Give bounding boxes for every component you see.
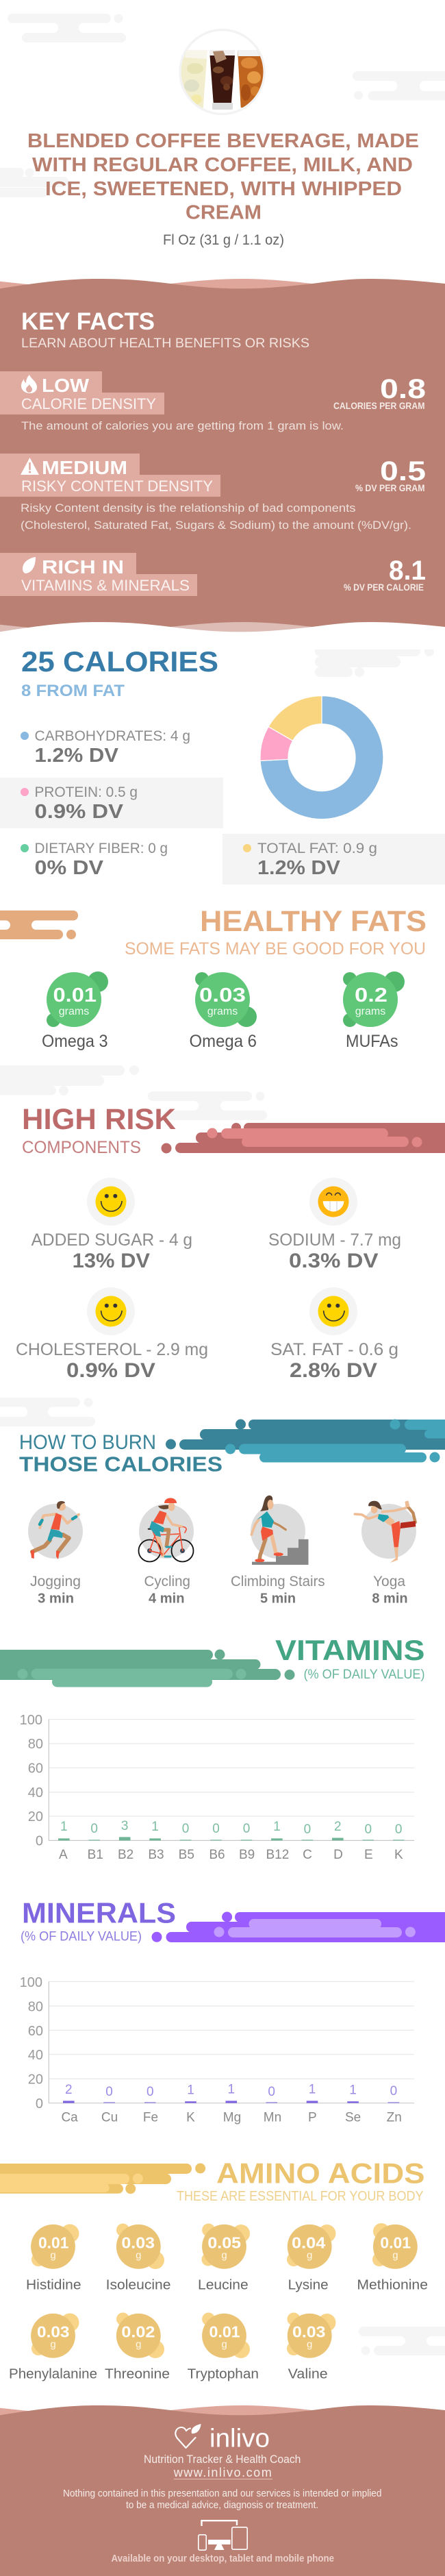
risk item: cholesterol: CHOLESTEROL - 2.9 mg	[16, 1340, 208, 1359]
bar chart: vitamins: 0	[212, 1822, 220, 1836]
bar chart: vitamins: 60	[28, 1761, 43, 1776]
stat: MUFAs: grams	[355, 1006, 385, 1017]
bar chart: minerals: 40	[28, 2048, 43, 2063]
icon: leaf	[23, 557, 36, 573]
photo: three iced drinks in glasses	[179, 30, 265, 114]
legend: total fat: TOTAL FAT: 0.9 g	[257, 841, 377, 856]
heading: vitamins: VITAMINS	[275, 1634, 424, 1666]
fact: rich in vitamins and minerals: RICH IN	[42, 556, 124, 578]
stat: MUFAs: MUFAs	[346, 1032, 398, 1051]
bar chart: vitamins: 0	[304, 1822, 311, 1837]
exercise: yoga	[355, 1501, 416, 1606]
heading: high risk: HIGH RISK	[22, 1103, 176, 1136]
stat: omega 6: 0.03	[199, 984, 246, 1006]
donut chart	[260, 696, 383, 819]
title: ICE, SWEETENED, WITH WHIPPED	[45, 178, 402, 200]
bar chart: minerals: 0	[390, 2084, 397, 2098]
serving size subtitle: Fl Oz (31 g / 1.1 oz)	[163, 232, 284, 248]
fact: medium risky content density: 0.5	[380, 456, 426, 486]
heading: healthy fats: HEALTHY FATS	[200, 905, 427, 938]
amino: methionine	[357, 2223, 428, 2293]
icon: smiley	[96, 1187, 126, 1217]
heading: how to burn those calories: THOSE CALORIES	[19, 1452, 222, 1476]
bar chart: minerals: P	[308, 2111, 317, 2125]
decoration: minerals bars	[152, 1911, 445, 1942]
heading: how to burn those calories	[19, 1431, 222, 1476]
amino: phenylalanine: Phenylalanine	[9, 2366, 97, 2382]
amino: leucine	[198, 2224, 250, 2293]
bar chart: vitamins: B12	[266, 1848, 289, 1862]
website link: www.inlivo.com	[173, 2466, 272, 2479]
fact: low calorie density: CALORIES PER GRAM	[333, 400, 424, 411]
amino: lysine: 0.04	[292, 2234, 326, 2252]
bar chart: minerals: 80	[28, 1999, 43, 2014]
stat: omega 6	[189, 972, 257, 1051]
panel: footer: Available on your desktop, tablet and mobile phone	[111, 2553, 334, 2564]
icon: stair climber	[251, 1496, 308, 1565]
legend: dietary fiber: DIETARY FIBER: 0 g	[34, 841, 168, 856]
amino: threonine: Threonine	[105, 2366, 170, 2382]
exercise: yoga: Yoga	[373, 1574, 405, 1589]
fact: low calorie density: 0.8	[380, 374, 426, 404]
bar chart: vitamins: A	[59, 1848, 68, 1862]
amino: histidine: 0.01	[38, 2234, 69, 2252]
heading: minerals: (% OF DAILY VALUE)	[21, 1930, 142, 1944]
heading: amino acids: AMINO ACIDS	[216, 2157, 424, 2190]
exercise: climbing stairs: 5 min	[260, 1591, 296, 1606]
amino: phenylalanine: 0.03	[37, 2323, 70, 2341]
fact: low calorie density: LOW	[42, 375, 90, 396]
legend: total fat: 1.2% DV	[257, 857, 341, 879]
risk item: saturated fat	[270, 1287, 398, 1382]
heading: 25 calories: 25 CALORIES	[21, 645, 218, 678]
bar chart: minerals: Fe	[143, 2111, 158, 2125]
icon: yoga pose	[355, 1501, 416, 1563]
panel: footer	[0, 2405, 445, 2576]
bar chart: vitamins: 0	[36, 1833, 43, 1848]
stat: omega 3: grams	[59, 1006, 89, 1017]
exercise: cycling	[138, 1498, 194, 1606]
amino: methionine: 0.01	[380, 2234, 411, 2252]
stat: omega 3	[42, 971, 108, 1051]
icon: warning triangle	[21, 458, 39, 475]
amino: isoleucine: 0.03	[121, 2234, 155, 2252]
bar chart: vitamins: 20	[28, 1809, 43, 1824]
bar chart: minerals: K	[186, 2111, 195, 2125]
exercise: jogging	[28, 1501, 83, 1606]
disclaimer: to be a medical advice, diagnosis or treatment.	[126, 2500, 318, 2511]
legend: protein: PROTEIN: 0.5 g	[34, 784, 138, 800]
panel: key facts background	[0, 279, 445, 649]
amino: valine: g	[307, 2339, 312, 2351]
bar chart: vitamins: E	[364, 1848, 373, 1862]
fact: medium risky content density	[0, 454, 426, 532]
legend: carbohydrates	[21, 728, 190, 767]
bar chart: minerals: 1	[187, 2083, 194, 2098]
risk item: saturated fat: 2.8% DV	[290, 1359, 377, 1382]
fact: rich in vitamins and minerals: VITAMINS & MINERALS	[21, 577, 190, 594]
title: BLENDED COFFEE BEVERAGE, MADE	[27, 130, 419, 152]
bar chart: minerals: 1	[349, 2083, 357, 2098]
amino: tryptophan: Tryptophan	[188, 2366, 259, 2382]
heading: healthy fats: SOME FATS MAY BE GOOD FOR YOU	[125, 939, 426, 958]
risk item: cholesterol	[16, 1287, 208, 1382]
heading: amino acids: THESE ARE ESSENTIAL FOR YOUR BODY	[177, 2189, 423, 2204]
fact: rich in vitamins and minerals: % DV PER CALORIE	[344, 582, 424, 593]
fact: rich in vitamins and minerals: 8.1	[389, 556, 426, 586]
bar chart: minerals: Ca	[61, 2111, 78, 2125]
bar chart: vitamins: 0	[182, 1822, 189, 1836]
stat: omega 6: Omega 6	[189, 1032, 257, 1051]
icon: grinning face	[318, 1187, 349, 1217]
amino: histidine: g	[50, 2250, 56, 2262]
bar chart: minerals: Zn	[387, 2111, 402, 2125]
bar chart: minerals: 100	[20, 1975, 42, 1990]
amino: isoleucine	[106, 2224, 171, 2293]
icon: devices	[199, 2521, 247, 2550]
amino: threonine	[105, 2313, 170, 2382]
bar chart: vitamins: B1	[88, 1848, 103, 1862]
bar chart: minerals: 0	[147, 2085, 154, 2099]
legend: dietary fiber	[21, 841, 168, 879]
bar chart: vitamins: 0	[395, 1822, 402, 1837]
legend: protein: 0.9% DV	[34, 801, 124, 823]
bar chart: vitamins: B3	[148, 1848, 164, 1862]
icon: smiley	[318, 1296, 349, 1326]
heading: vitamins	[275, 1634, 424, 1682]
exercise: cycling: 4 min	[149, 1591, 185, 1606]
fact: low calorie density: CALORIE DENSITY	[21, 395, 156, 412]
amino: methionine: g	[392, 2250, 398, 2262]
amino: leucine: 0.05	[207, 2234, 241, 2252]
bar chart: vitamins: 1	[60, 1820, 68, 1834]
bar chart: minerals: 20	[28, 2072, 43, 2087]
amino: valine	[287, 2313, 335, 2382]
heading: key facts: LEARN ABOUT HEALTH BENEFITS OR RISKS	[21, 336, 309, 351]
bar chart: vitamins: 0	[243, 1822, 250, 1836]
fact: medium risky content density: Risky Content density is the relationship of bad components	[21, 501, 356, 515]
heading: 25 calories: 8 FROM FAT	[21, 682, 125, 700]
fact: medium risky content density: RISKY CONTENT DENSITY	[21, 478, 213, 495]
fact: rich in vitamins and minerals	[0, 553, 426, 596]
bar chart: minerals: 0	[268, 2085, 275, 2099]
title: CREAM	[186, 201, 262, 223]
amino: threonine: 0.02	[121, 2323, 155, 2341]
heading: minerals	[21, 1897, 176, 1944]
heading: minerals: MINERALS	[22, 1897, 176, 1929]
title: WITH REGULAR COFFEE, MILK, AND	[32, 154, 413, 176]
amino: leucine: Leucine	[198, 2277, 249, 2293]
legend: carbohydrates: 1.2% DV	[34, 745, 119, 767]
amino: methionine: Methionine	[357, 2277, 428, 2293]
bar chart: minerals: Se	[345, 2111, 361, 2125]
bar chart: vitamins: B6	[209, 1848, 225, 1862]
logo: inlivo	[175, 2424, 270, 2453]
bar chart: minerals: Cu	[101, 2111, 118, 2125]
bar chart: minerals: Mn	[264, 2111, 281, 2125]
exercise: cycling: Cycling	[144, 1574, 190, 1589]
risk item: added sugar: 13% DV	[73, 1250, 150, 1272]
amino: lysine: Lysine	[288, 2277, 329, 2293]
decoration: amino acid bars	[0, 2164, 205, 2194]
bar chart: vitamins: B2	[118, 1848, 134, 1862]
bar chart: minerals: 2	[65, 2083, 73, 2097]
heading: amino acids	[177, 2157, 424, 2204]
bar chart: vitamins: 100	[20, 1713, 42, 1728]
fact: medium risky content density: (Cholesterol, Saturated Fat, Sugars & Sodium) to the amount (%DV/gr).	[21, 519, 411, 532]
amino: lysine	[287, 2225, 335, 2293]
bar chart: vitamins: K	[394, 1848, 403, 1862]
bar chart: minerals: 60	[28, 2024, 43, 2039]
bar chart: vitamins: 1	[151, 1820, 159, 1834]
exercise: yoga: 8 min	[372, 1591, 408, 1606]
risk item: sodium: SODIUM - 7.7 mg	[268, 1230, 401, 1250]
heading: vitamins: (% OF DAILY VALUE)	[304, 1668, 424, 1682]
stat: omega 3: 0.01	[53, 984, 97, 1006]
icon: jogger	[31, 1501, 79, 1559]
legend: total fat	[222, 834, 445, 884]
heading: how to burn those calories: HOW TO BURN	[19, 1431, 156, 1454]
heading: key facts	[21, 308, 309, 351]
risk item: added sugar	[31, 1178, 192, 1272]
risk item: cholesterol: 0.9% DV	[66, 1359, 155, 1382]
amino: tryptophan: 0.01	[209, 2323, 240, 2341]
bar chart: vitamins: 3	[121, 1819, 128, 1833]
heading: 25 calories	[21, 645, 218, 700]
amino: tryptophan: g	[221, 2339, 227, 2351]
amino: phenylalanine: g	[50, 2339, 56, 2351]
icon: flame	[21, 375, 37, 393]
fact: medium risky content density: % DV PER GRAM	[355, 482, 424, 493]
amino: histidine: Histidine	[26, 2277, 81, 2293]
icon: cyclist	[138, 1498, 193, 1562]
decoration: burn calories bars	[166, 1420, 445, 1462]
bar chart: minerals: 1	[309, 2083, 316, 2096]
bar chart: minerals: 1	[228, 2083, 235, 2096]
risk item: saturated fat: SAT. FAT - 0.6 g	[270, 1340, 398, 1359]
amino: tryptophan	[188, 2313, 259, 2382]
heading: key facts: KEY FACTS	[21, 308, 155, 335]
bar chart: minerals	[20, 1975, 414, 2125]
amino: histidine	[26, 2224, 81, 2293]
bar chart: minerals: 0	[105, 2085, 113, 2099]
legend: dietary fiber: 0% DV	[34, 857, 104, 879]
stat: omega 6: grams	[207, 1006, 238, 1017]
bar chart: vitamins: B5	[179, 1848, 194, 1862]
decoration: vitamins bars	[0, 1650, 294, 1687]
stat: omega 3: Omega 3	[42, 1032, 108, 1051]
logo: inlivo: inlivo	[209, 2425, 270, 2453]
legend: carbohydrates: CARBOHYDRATES: 4 g	[34, 728, 190, 744]
stat: MUFAs: 0.2	[355, 984, 387, 1006]
decoration: high risk bars	[162, 1123, 445, 1154]
fact: low calorie density: The amount of calories you are getting from 1 gram is low.	[21, 419, 344, 432]
bar chart: vitamins: 80	[28, 1737, 43, 1752]
exercise: climbing stairs: Climbing Stairs	[231, 1574, 325, 1589]
fact: low calorie density	[0, 371, 426, 432]
bar chart: vitamins: 1	[273, 1820, 281, 1834]
fact: medium risky content density: MEDIUM	[42, 457, 127, 478]
bar chart: vitamins: B9	[239, 1848, 255, 1862]
disclaimer	[63, 2488, 382, 2511]
bar chart: vitamins: 0	[365, 1822, 372, 1837]
amino: threonine: g	[136, 2339, 141, 2351]
bar chart: vitamins	[20, 1713, 414, 1862]
bar chart: vitamins: 0	[90, 1822, 98, 1836]
exercise: jogging: Jogging	[30, 1574, 81, 1589]
disclaimer: Nothing contained in this presentation and our services is intended or implied	[63, 2488, 382, 2499]
bar chart: vitamins: C	[303, 1848, 312, 1862]
amino: phenylalanine	[9, 2313, 97, 2382]
bar chart: vitamins: D	[333, 1848, 343, 1862]
decoration: healthy fats bars	[0, 911, 86, 939]
bar chart: vitamins: 40	[28, 1785, 43, 1800]
risk item: added sugar: ADDED SUGAR - 4 g	[31, 1230, 192, 1250]
amino: isoleucine: g	[136, 2250, 141, 2262]
amino: valine: Valine	[288, 2366, 328, 2382]
heading: high risk: COMPONENTS	[22, 1138, 141, 1157]
risk item: sodium: 0.3% DV	[289, 1250, 378, 1272]
exercise: climbing stairs	[231, 1496, 325, 1606]
heading: high risk	[22, 1103, 176, 1157]
exercise: jogging: 3 min	[38, 1591, 74, 1606]
stat: MUFAs	[343, 971, 405, 1051]
amino: valine: 0.03	[292, 2323, 325, 2341]
bar chart: vitamins: 2	[334, 1820, 342, 1834]
amino: lysine: g	[307, 2250, 312, 2262]
amino: isoleucine: Isoleucine	[106, 2277, 171, 2293]
panel: footer: Nutrition Tracker & Health Coach	[144, 2453, 301, 2466]
bar chart: minerals: 0	[36, 2096, 43, 2111]
bar chart: minerals: Mg	[223, 2111, 241, 2125]
legend: protein	[0, 778, 223, 828]
title	[27, 130, 419, 223]
risk item: sodium	[268, 1178, 401, 1272]
icon: smiley	[96, 1296, 126, 1326]
amino: leucine: g	[221, 2250, 227, 2262]
heading: healthy fats	[125, 905, 427, 958]
